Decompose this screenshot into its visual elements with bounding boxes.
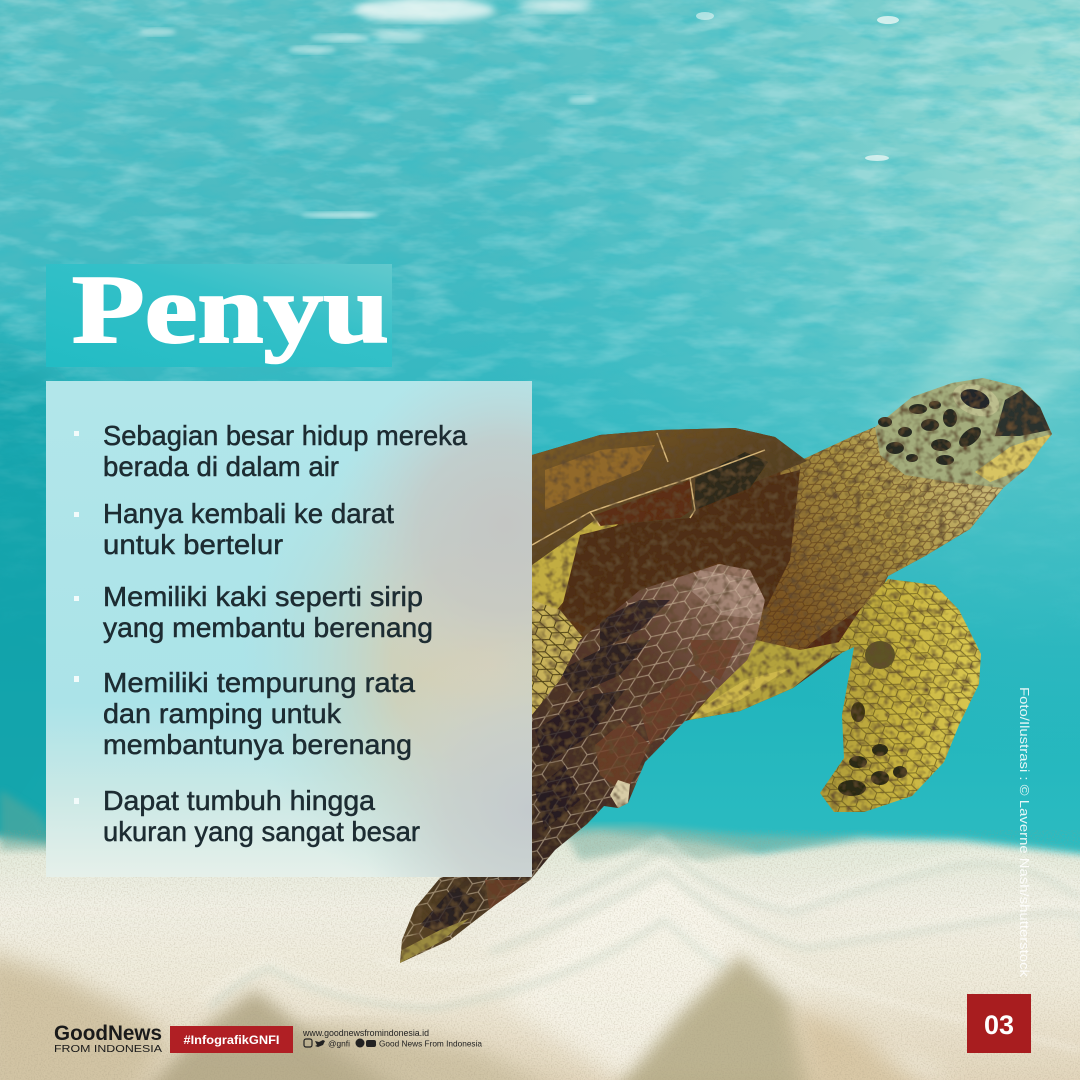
fact 2: Hanya kembali ke darat xyxy=(103,498,394,529)
page number xyxy=(967,994,1031,1053)
turtle: head xyxy=(875,378,1052,488)
fact 4: dan ramping untuk xyxy=(103,698,342,729)
logo: GoodNews From Indonesia: FROM INDONESIA xyxy=(54,1044,162,1055)
turtle: neck xyxy=(745,427,1003,660)
photo credit: Foto/Ilustrasi : © Laverne Nash/shutterstock xyxy=(1017,687,1031,978)
fact 1 xyxy=(74,420,467,482)
turtle: eye xyxy=(948,378,1004,422)
footer xyxy=(54,1022,482,1055)
fact 2 xyxy=(74,498,394,560)
fact 5: Dapat tumbuh hingga xyxy=(103,785,375,816)
panel: facts list xyxy=(46,381,532,877)
hashtag badge xyxy=(170,1026,293,1053)
turtle: body and neck xyxy=(532,427,1003,740)
turtle xyxy=(380,378,1052,980)
fact 2: untuk bertelur xyxy=(103,529,283,560)
social icons and handles: Good News From Indonesia xyxy=(379,1038,482,1048)
logo: GoodNews From Indonesia: GoodNews xyxy=(54,1022,162,1045)
fact 3: yang membantu berenang xyxy=(103,612,433,643)
turtle: shell underside yellow rim xyxy=(532,505,640,640)
fact 4 xyxy=(74,667,415,760)
turtle: front flipper xyxy=(400,564,765,963)
fact 4: Memiliki tempurung rata xyxy=(103,667,415,698)
fact 1: berada di dalam air xyxy=(103,451,339,482)
turtle: dark neck band xyxy=(765,605,865,685)
turtle: belly yellow xyxy=(689,640,850,720)
turtle: neck scale texture xyxy=(745,427,1003,660)
logo: GoodNews From Indonesia xyxy=(54,1022,162,1055)
social icons and handles: @gnfi xyxy=(328,1038,350,1048)
fact 1: Sebagian besar hidup mereka xyxy=(103,420,467,451)
website: www.goodnewsfromindonesia.id xyxy=(302,1028,429,1038)
turtle: yellow netted hip xyxy=(532,600,585,715)
fact 3 xyxy=(74,581,433,643)
turtle: rear flipper xyxy=(820,579,981,812)
fact 5: ukuran yang sangat besar xyxy=(103,816,420,847)
sand seabed xyxy=(0,790,1080,1080)
photo background: underwater scene xyxy=(0,0,1080,852)
fact 4: membantunya berenang xyxy=(103,729,412,760)
turtle: dark plastron band xyxy=(560,470,800,630)
fact 5 xyxy=(74,785,420,847)
social icons and handles xyxy=(304,1038,482,1048)
fact 3: Memiliki kaki seperti sirip xyxy=(103,581,423,612)
panel background xyxy=(46,381,532,877)
page number: 03 xyxy=(984,1010,1014,1040)
turtle: shell xyxy=(532,428,807,565)
hashtag badge: #InfografikGNFI xyxy=(184,1033,280,1047)
turtle: head scales xyxy=(878,401,984,465)
title: Penyu: Penyu xyxy=(72,256,389,364)
